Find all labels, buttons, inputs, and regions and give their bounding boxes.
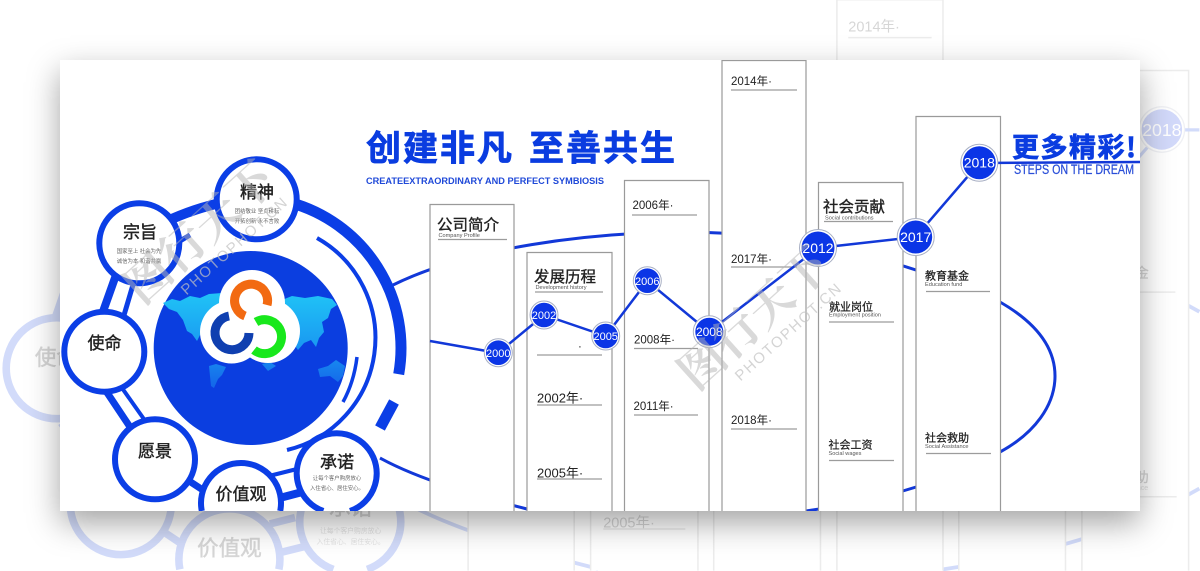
circle: 宗旨: 国家至上 社会为先 [117, 247, 162, 255]
outer ring segments [100, 202, 401, 500]
column: 教育基金: Social Assistance [925, 444, 969, 450]
faded enlarged background copy: 社会救助 [1093, 469, 1149, 485]
node 2012 [800, 230, 836, 266]
faded enlarged background copy: 承诺 [329, 496, 372, 520]
column: 社会贡献: Social wages [828, 451, 862, 457]
column: 教育基金: Education fund [925, 282, 962, 288]
column: 社会贡献: 社会贡献 [823, 198, 885, 216]
faded enlarged background copy: 2014年· [848, 18, 900, 35]
faded enlarged background copy: Social Assistance [1093, 485, 1148, 492]
node 2006 [633, 267, 661, 295]
circle: 愿景: 愿景 [138, 442, 172, 461]
node 2017 [897, 218, 934, 256]
column: 发展历程 [527, 252, 612, 511]
column: 公司简介 [430, 204, 514, 511]
column: 社会贡献 [818, 182, 903, 511]
node 2018 [961, 144, 998, 181]
circle: 宗旨: 宗旨 [123, 223, 157, 242]
watermark left: 图行天下 [115, 152, 286, 313]
circle: 精神: 开拓创新 永不言败 [235, 217, 280, 225]
subtitle: CREATEEXTRAORDINARY AND PERFECT SYMBIOSIS [366, 176, 604, 186]
faded enlarged background copy: 2018 [1142, 120, 1182, 140]
title part two: 至善共生 [529, 120, 677, 172]
column: years 2014-2018: 2018年· [731, 413, 772, 427]
node 2008 [693, 316, 725, 348]
faded enlarged background copy: 价值观 [197, 537, 262, 561]
circle: 使命: 使命 [88, 333, 122, 353]
globe [154, 251, 348, 445]
column: 社会贡献: Social contributions [825, 216, 874, 222]
world map continents [163, 293, 345, 388]
circle: 宗旨 [99, 203, 179, 283]
node 2006: 2006 [635, 276, 660, 288]
column: 公司简介: 公司简介 [437, 216, 500, 234]
column: 发展历程: · [578, 341, 582, 353]
node 2008: 2008 [696, 325, 723, 339]
title: 创建非凡 [366, 120, 514, 172]
faded enlarged background copy: 入住省心、居住安心。 [317, 537, 385, 546]
column: 发展历程: 发展历程 [534, 268, 596, 286]
column: years 2006-2011 [624, 180, 709, 511]
column: years 2006-2011: 2011年· [634, 399, 674, 413]
watermark right: 图行天下 [669, 238, 840, 399]
circle: 承诺: 入住省心、居住安心。 [310, 484, 364, 492]
logo white trefoil [200, 270, 300, 364]
faded enlarged background copy: 使命 [35, 346, 78, 370]
heading: 更多精彩: 更多精彩! [1012, 126, 1138, 165]
column: 社会贡献: 就业岗位 [829, 300, 873, 314]
circle: 使命 [64, 312, 144, 392]
circle: 承诺: 承诺 [320, 453, 354, 472]
column: 社会贡献: 社会工资 [828, 438, 872, 452]
circle: 承诺: 让每个客户购房放心 [313, 474, 362, 482]
column: years 2014-2018: 2014年· [731, 74, 772, 88]
circle: 承诺 [297, 433, 377, 511]
node 2005 [592, 322, 620, 350]
column: years 2006-2011: 2006年· [632, 198, 673, 212]
circle: 精神: 精神 [240, 183, 274, 202]
faded enlarged background copy: 让每个客户购房放心 [320, 526, 381, 535]
node 2002 [530, 301, 558, 329]
circle: 价值观: 价值观 [216, 485, 266, 504]
column: years 2014-2018: 2017年· [731, 252, 772, 266]
watermark left: PHOTOPHOT.CN [178, 194, 292, 299]
column: 社会贡献: Employment position [829, 312, 881, 318]
node 2000 [484, 339, 512, 367]
column: 发展历程: 2002年· [537, 390, 583, 406]
circle: 价值观 [201, 463, 281, 511]
circle: 精神: 团结敬业 坚贞耕耘 [235, 207, 280, 215]
watermark right: PHOTOPHOT.CN [732, 280, 846, 385]
node 2002: 2002 [532, 310, 556, 322]
circle: 宗旨: 诚信为本 和谐共赢 [117, 257, 162, 265]
column: 教育基金: 教育基金 [925, 268, 969, 282]
column: 教育基金: 社会救助 [925, 430, 969, 444]
faded enlarged background copy: 教育基金 [1093, 265, 1149, 281]
column: years 2006-2011: 2008年· [634, 332, 675, 346]
node 2018: 2018 [964, 155, 995, 171]
node 2012: 2012 [802, 240, 834, 256]
main card [60, 60, 1140, 511]
node 2017: 2017 [900, 229, 931, 245]
column: 发展历程: 2005年· [537, 466, 583, 480]
column: 教育基金 [916, 116, 1000, 511]
logo rings [215, 284, 282, 354]
circle: 愿景 [115, 419, 195, 499]
globe diagram [64, 159, 401, 511]
circle: 精神 [217, 159, 297, 239]
column: years 2014-2018 [722, 60, 806, 511]
faded enlarged background copy: 2005年· [603, 515, 655, 532]
big blue arc behind the columns [380, 232, 1055, 511]
node 2005: 2005 [593, 331, 618, 343]
column: 发展历程: Development history [536, 285, 587, 291]
column: 公司简介: Company Profile [438, 233, 480, 239]
node 2000: 2000 [486, 348, 511, 360]
timeline line [430, 162, 1140, 353]
